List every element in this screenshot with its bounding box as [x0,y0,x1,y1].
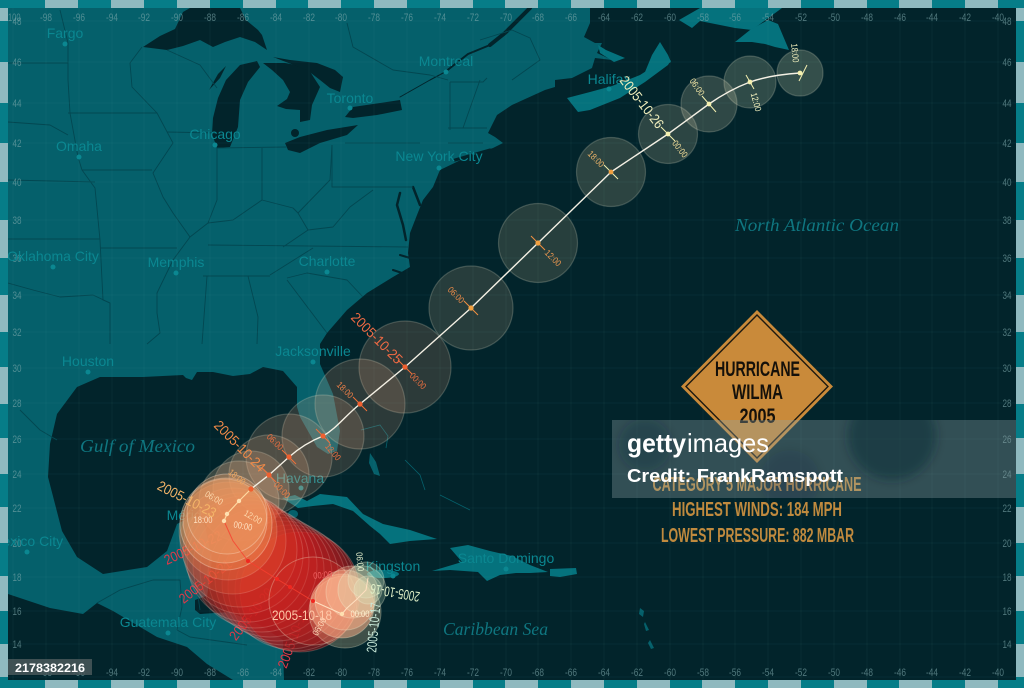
longitude labels bottom: -46 [894,667,906,679]
longitude labels top: -64 [598,12,610,24]
time labels: 00:00 [670,138,690,160]
latitude labels right: 48 [1002,16,1012,28]
longitude labels bottom: -42 [959,667,971,679]
latitude labels left [12,16,22,651]
latitude labels right: 24 [1002,469,1012,481]
latitude labels right: 36 [1002,253,1012,265]
latitude labels left: 22 [12,503,22,515]
latitude labels right: 18 [1002,572,1012,584]
longitude labels bottom: -44 [926,667,938,679]
latitude labels right: 46 [1002,57,1012,69]
date labels: 2005-10-24 [211,417,269,475]
latitude labels left: 24 [12,469,22,481]
longitude labels bottom: -70 [500,667,512,679]
land: Hispaniola [432,545,548,581]
city labels and dots: Havana [276,470,324,486]
longitude labels top: -70 [500,12,512,24]
water: St Lawrence river and bays [393,8,530,275]
latitude labels right: 38 [1002,215,1012,227]
longitude labels top: -72 [467,12,479,24]
longitude labels bottom: -96 [73,667,85,679]
longitude labels bottom [40,668,1004,676]
longitude labels top: -98 [40,12,52,24]
longitude labels top: -60 [664,12,676,24]
latitude labels right: 30 [1002,363,1012,375]
water: Great Lakes [143,8,402,153]
city labels and dots: Houston [62,353,114,369]
watermark band: getty [627,428,687,458]
date labels: 2005-10-17 [363,602,384,653]
longitude labels bottom: -64 [598,667,610,679]
label: North Atlantic Ocean: North Atlantic Ocean [734,215,899,235]
longitude labels bottom: -98 [40,667,52,679]
longitude labels top: -86 [237,12,249,24]
time labels: 06:00 [265,432,285,452]
longitude labels bottom: -40 [992,667,1004,679]
longitude labels bottom: -52 [795,667,807,679]
longitude labels bottom: -84 [270,667,282,679]
latitude labels right: 14 [1002,639,1012,651]
land: Labrador shore [679,8,782,30]
longitude labels top: -50 [828,12,840,24]
longitude labels bottom: -90 [171,667,183,679]
latitude labels left: 40 [12,177,22,189]
red date labels behind the wind field [161,527,310,670]
latitude labels right: 16 [1002,606,1012,618]
latitude labels left: 32 [12,327,22,339]
city labels and dots: New York City [395,148,483,164]
latitude labels left: 46 [12,57,22,69]
longitude labels bottom: -56 [729,667,741,679]
longitude labels top: -52 [795,12,807,24]
longitude labels top: -82 [303,12,315,24]
watermark band: Credit: FrankRamspott [627,466,843,486]
longitude labels top [8,14,1004,21]
date labels: 2005-10-16 [369,581,421,605]
land: Cape Breton and PEI [598,42,671,72]
longitude labels top: -66 [565,12,577,24]
longitude labels bottom: -86 [237,667,249,679]
wind field circles: late track [199,50,823,541]
longitude labels top: -84 [270,12,282,24]
latitude labels left: 42 [12,138,22,150]
land: Puerto Rico [550,568,577,577]
latitude labels right: 40 [1002,177,1012,189]
latitude labels right [1002,16,1012,651]
latitude labels right: 42 [1002,138,1012,150]
latitude labels left: 16 [12,606,22,618]
date labels: 2005-10-25 [348,309,406,367]
longitude labels bottom: -92 [138,667,150,679]
time labels [194,43,801,637]
latitude labels right: 20 [1002,538,1012,550]
watermark band [612,420,1016,498]
longitude labels bottom: -80 [335,667,347,679]
longitude labels bottom: -66 [565,667,577,679]
longitude labels top: -56 [729,12,741,24]
land: North and Central America [8,8,612,680]
time labels: 18:00 [194,515,212,525]
time labels: 06:00 [354,552,366,572]
city labels and dots: Jacksonville [275,343,351,359]
wind field circles: early track [269,557,386,648]
longitude labels top: -90 [171,12,183,24]
latitude labels left: 36 [12,253,22,265]
wind field circles: peach core at Oct 23 [180,474,272,570]
wind field circles: major hurricane stage [179,482,360,652]
longitude labels bottom: -78 [368,667,380,679]
longitude labels top: -100 [6,12,20,24]
longitude labels bottom: -50 [828,667,840,679]
image id tag: 2178382216 [15,663,85,675]
date labels: 2005-10-26 [617,73,667,131]
latitude labels left: 38 [12,215,22,227]
city labels and dots: Mérida [167,507,210,523]
longitude labels top: -76 [401,12,413,24]
state and national borders [8,10,540,645]
time labels: 00:00 [313,569,333,581]
Bahamas outlines [361,425,470,510]
longitude labels top: -46 [894,12,906,24]
latitude labels right: 44 [1002,98,1012,110]
longitude labels top: -80 [335,12,347,24]
latitude labels right: 32 [1002,327,1012,339]
red date labels behind the wind field: 2005-10-20 [226,584,277,643]
latitude labels left: 48 [12,16,22,28]
track markers [222,65,807,616]
latitude labels left: 14 [12,639,22,651]
longitude labels top: -68 [532,12,544,24]
image id tag [8,659,92,675]
longitude labels bottom: -82 [303,667,315,679]
time labels: 12:00 [242,508,264,526]
red date labels behind the wind field: 2005-10-19 [274,606,310,670]
land: Andros and small Caribbean islands [288,453,654,649]
longitude labels top: -62 [631,12,643,24]
city labels and dots: Montreal [419,53,473,69]
longitude labels bottom: -58 [697,667,709,679]
longitude labels bottom: -74 [434,667,446,679]
stats: hurricane category, winds, pressure: LOWEST PRESSURE: 882 MBAR [661,525,854,547]
city labels and dots: Toronto [327,90,374,106]
longitude labels top: -78 [368,12,380,24]
time labels: 06:00 [310,616,328,637]
latitude labels right: 22 [1002,503,1012,515]
latitude labels left: 30 [12,363,22,375]
label: Caribbean Sea: Caribbean Sea [443,619,548,639]
latitude labels left: 34 [12,290,22,302]
stats: hurricane category, winds, pressure [653,477,862,542]
latitude labels left: 44 [12,98,22,110]
city labels and dots: Santo Domingo [458,550,554,566]
time labels: 00:00 [408,371,428,391]
longitude labels bottom: -68 [532,667,544,679]
date labels: 2005-10-23 [155,477,219,521]
latitude labels left: 26 [12,434,22,446]
land: Nova Scotia [567,60,671,112]
red date labels behind the wind field: 2005-10-22 [161,527,225,568]
longitude labels top: -44 [926,12,938,24]
road sign: Hurricane Wilma 2005: HURRICANE [715,358,800,381]
storm track line [224,73,800,614]
time labels: 06:00 [203,489,225,507]
longitude labels bottom: -60 [664,667,676,679]
time labels: 06:00 [687,76,707,98]
longitude labels top: -92 [138,12,150,24]
longitude labels top: -48 [861,12,873,24]
city labels and dots [0,25,630,636]
road sign: Hurricane Wilma 2005 [681,310,833,463]
longitude labels top: -94 [106,12,118,24]
longitude labels bottom: -88 [204,667,216,679]
city labels and dots: Oklahoma City [7,248,99,264]
longitude labels bottom: -94 [106,667,118,679]
longitude labels bottom: -48 [861,667,873,679]
stats: hurricane category, winds, pressure: HIGHEST WINDS: 184 MPH [672,499,842,521]
city labels and dots: Omaha [56,138,102,154]
time labels: 18:00 [227,467,247,487]
time labels: 18:00 [586,149,606,169]
city labels and dots: Fargo [47,25,83,41]
city labels and dots: Halifax [588,71,630,87]
city labels and dots: Guatemala City [120,614,216,630]
longitude labels top: -58 [697,12,709,24]
latitude labels left: 18 [12,572,22,584]
latitude labels left: 28 [12,398,22,410]
longitude labels top: -54 [762,12,774,24]
red date labels behind the wind field: 2005-10-21 [176,556,234,606]
road sign: Hurricane Wilma 2005: 2005 [740,405,776,428]
time labels: 12:00 [749,92,763,112]
latitude labels right: 26 [1002,434,1012,446]
date labels: 2005-10-18 [272,607,332,623]
time labels: 18:00 [789,43,801,63]
city labels and dots: Charlotte [299,253,356,269]
city labels and dots: Memphis [148,254,204,270]
city labels and dots: Chicago [189,126,241,142]
time labels: 00:00 [272,480,292,500]
stats: hurricane category, winds, pressure: CATEGORY 5 MAJOR HURRICANE [652,474,862,496]
time labels: 18:00 [335,380,355,400]
time labels: 06:00 [446,285,466,305]
longitude labels top: -88 [204,12,216,24]
land: Cuba [282,494,437,544]
longitude labels top: -40 [992,12,1004,24]
longitude labels top: -96 [73,12,85,24]
watermark band: images [687,428,769,458]
latitude labels right: 28 [1002,398,1012,410]
longitude labels bottom: -76 [401,667,413,679]
label: Gulf of Mexico: Gulf of Mexico [80,436,195,456]
longitude labels top: -74 [434,12,446,24]
longitude labels bottom: -72 [467,667,479,679]
longitude labels top: -42 [959,12,971,24]
time labels: 12:00 [543,248,563,268]
city labels and dots: Kingston [366,558,420,574]
latitude labels right: 34 [1002,290,1012,302]
road sign: Hurricane Wilma 2005: WILMA [732,381,783,404]
time labels: 00:00 [233,519,253,533]
land: Newfoundland [735,20,789,50]
land: Jamaica [367,570,399,578]
water: Bay of Honduras [195,596,206,614]
time labels: 12:00 [323,442,343,462]
longitude labels bottom: -62 [631,667,643,679]
latitude labels left: 20 [12,538,22,550]
date labels [155,73,667,653]
longitude labels bottom: -54 [762,667,774,679]
time labels: 00:00 [350,609,370,619]
